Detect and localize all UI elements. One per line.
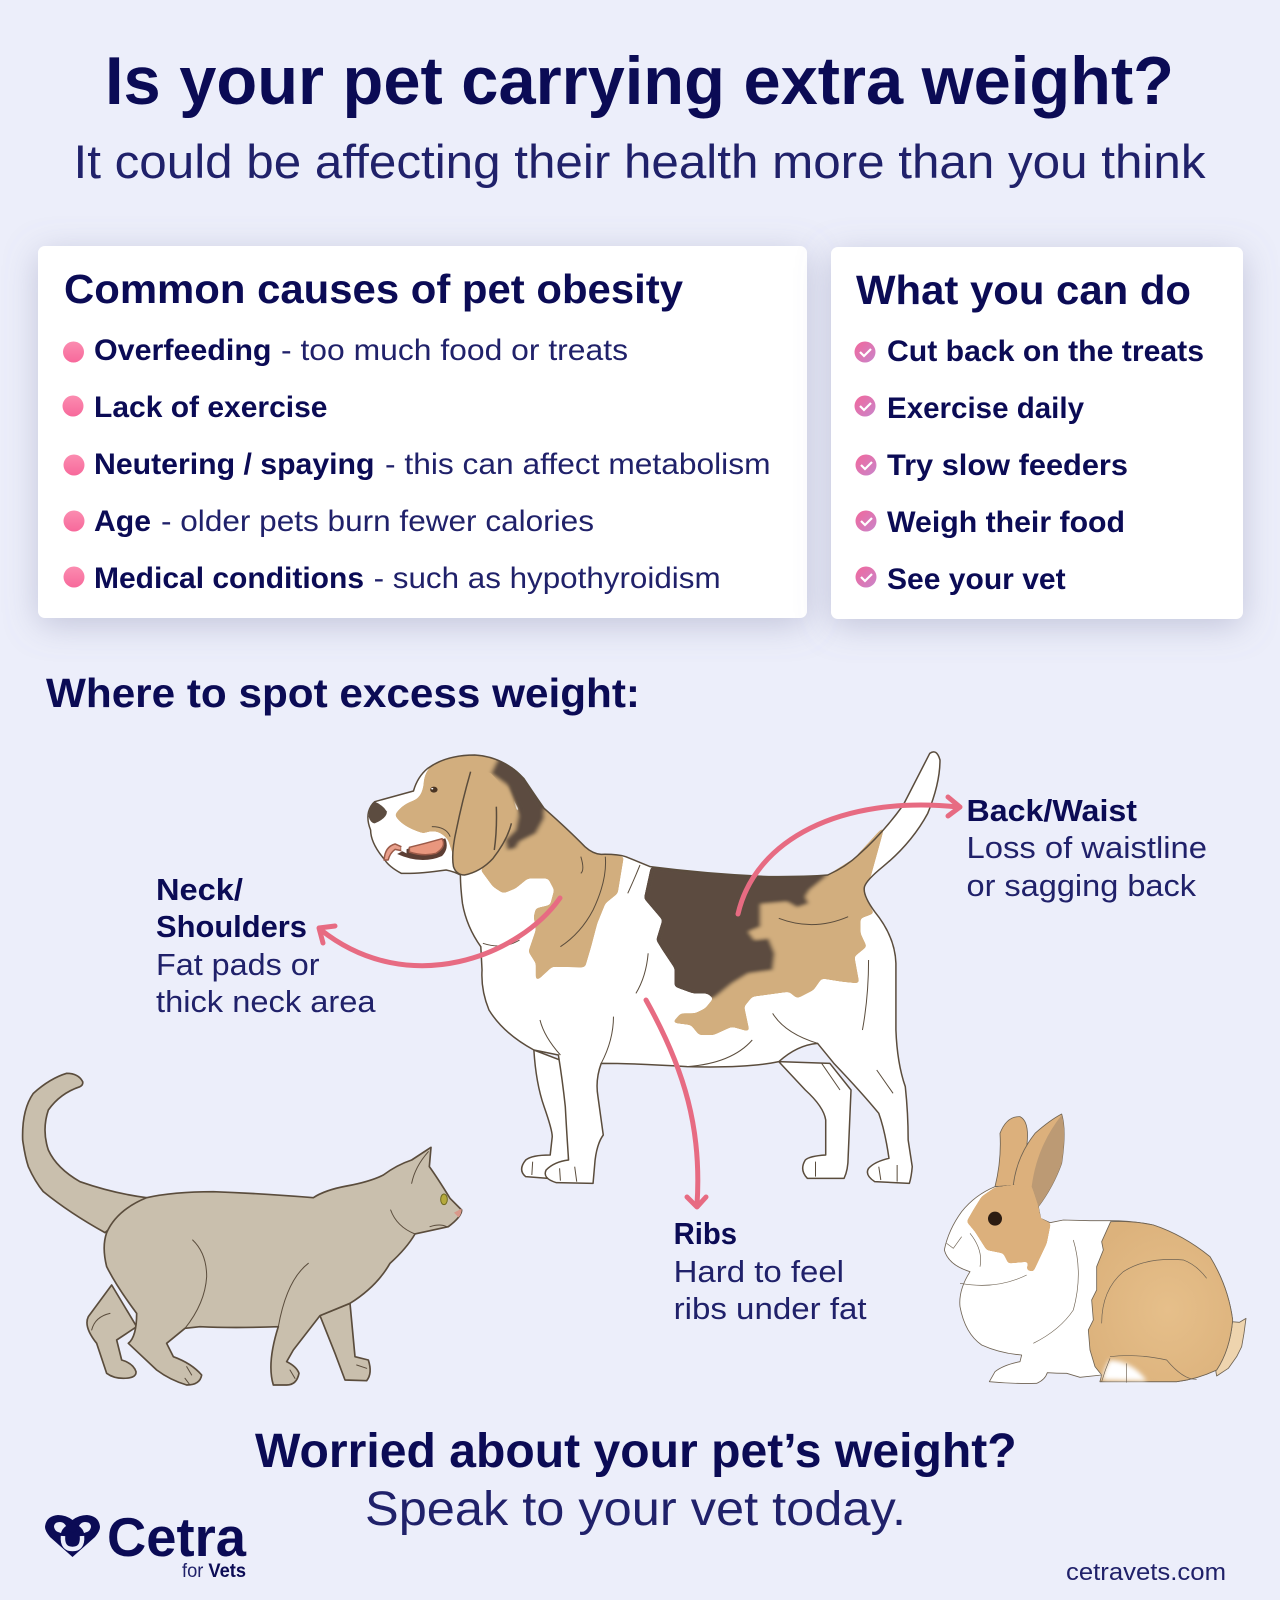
item: see vet: See your vet	[887, 563, 1066, 596]
item: overfeeding: Overfeeding	[94, 334, 272, 367]
label: neck and shoulders: Neck/	[156, 872, 243, 907]
icon: heart with paw	[45, 1515, 100, 1557]
rabbit front ear	[1013, 1114, 1064, 1207]
illustration: cat	[23, 1073, 462, 1385]
item: overfeeding	[63, 334, 628, 367]
item: medical conditions: - such as hypothyroidism	[374, 562, 721, 595]
closing question: Worried about your pet’s weight?	[255, 1425, 1017, 1478]
closing call to action: Speak to your vet today.	[365, 1483, 906, 1536]
label: back and waist: or sagging back	[966, 868, 1197, 903]
item: overfeeding: - too much food or treats	[281, 334, 628, 367]
item: lack of exercise: Lack of exercise	[94, 391, 328, 424]
label: neck and shoulders: Shoulders	[156, 909, 307, 944]
item: medical conditions	[64, 562, 721, 595]
item: neutering	[64, 448, 770, 481]
item: age: - older pets burn fewer calories	[161, 505, 594, 538]
sub-brand: for Vets	[182, 1560, 246, 1582]
label: ribs	[674, 1216, 867, 1326]
item: medical conditions: Medical conditions	[94, 562, 364, 595]
illustration: dog	[368, 752, 940, 1183]
panel: what you can do	[831, 247, 1243, 619]
logo: Cetra for Vets	[45, 1506, 246, 1582]
item: cut back: Cut back on the treats	[887, 335, 1204, 368]
wordmark: Cetra	[107, 1506, 246, 1568]
panel: common causes	[38, 246, 807, 618]
label: ribs: Ribs	[674, 1216, 737, 1251]
arrow: back and waist	[738, 797, 960, 914]
item: neutering: Neutering / spaying	[94, 448, 374, 481]
item: weigh food: Weigh their food	[887, 506, 1125, 539]
label: neck and shoulders	[156, 872, 376, 1019]
title: Is your pet carrying extra weight?	[105, 43, 1174, 119]
rabbit tail	[1213, 1318, 1246, 1376]
subtitle: It could be affecting their health more than you think	[74, 135, 1206, 188]
heading: common causes: Common causes of pet obesity	[64, 266, 683, 312]
label: ribs: ribs under fat	[674, 1291, 867, 1326]
label: neck and shoulders: Fat pads or	[156, 947, 320, 982]
arrow: neck and shoulders	[319, 898, 560, 966]
heading: what you can do: What you can do	[856, 267, 1191, 313]
illustration: rabbit	[944, 1114, 1246, 1383]
label: neck and shoulders: thick neck area	[156, 984, 376, 1019]
label: back and waist: Back/Waist	[966, 793, 1137, 828]
label: back and waist	[966, 793, 1207, 903]
arrow: ribs	[646, 1000, 706, 1207]
item: exercise daily: Exercise daily	[887, 392, 1084, 425]
section heading: Where to spot excess weight:	[46, 670, 640, 716]
item: age: Age	[94, 505, 151, 538]
label: ribs: Hard to feel	[674, 1254, 844, 1289]
item: slow feeders: Try slow feeders	[887, 449, 1128, 482]
label: back and waist: Loss of waistline	[966, 830, 1207, 865]
website: cetravets.com	[1066, 1559, 1226, 1586]
rabbit back ear	[995, 1117, 1027, 1187]
item: neutering: - this can affect metabolism	[385, 448, 770, 481]
